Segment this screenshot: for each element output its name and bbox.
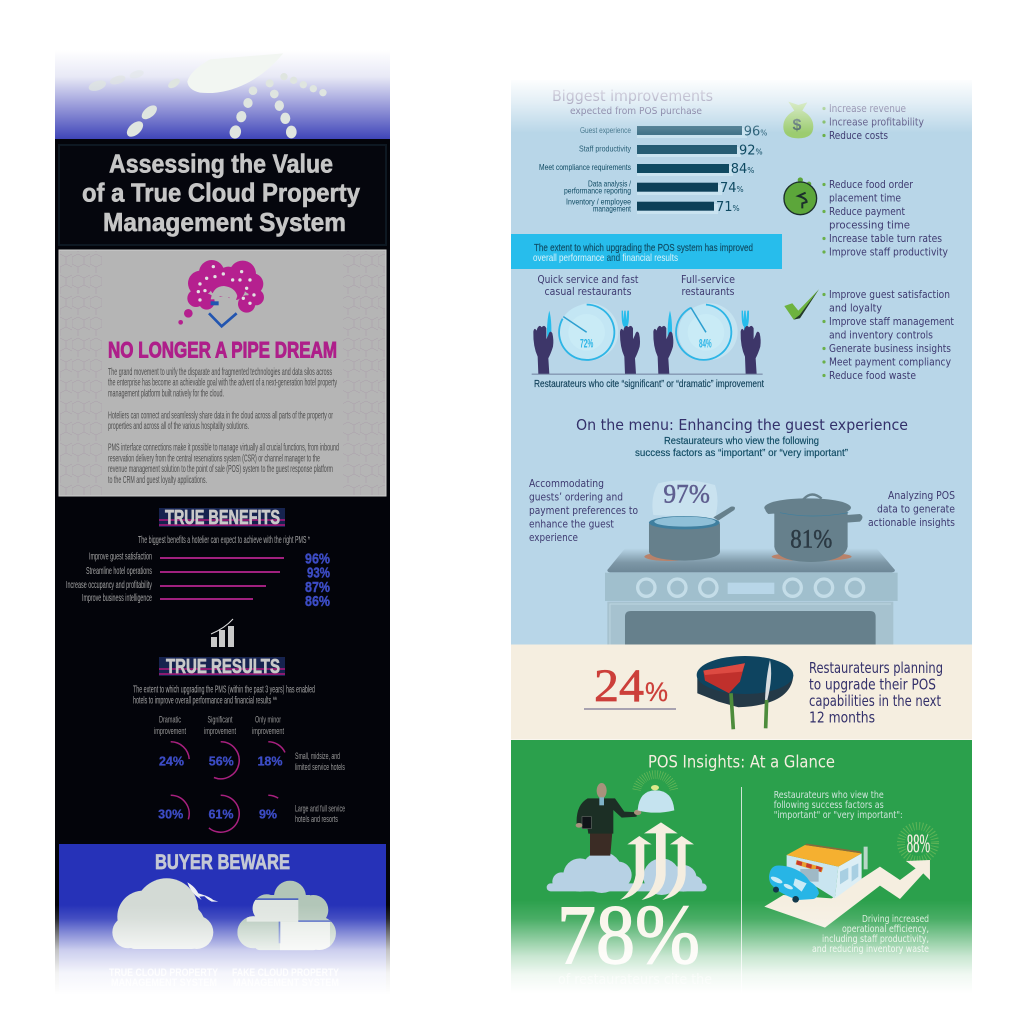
bar chart: true benefits: 96% [305,551,330,567]
panel: POS insights at a glance [511,740,972,1002]
bar chart: biggest improvements [539,124,767,215]
text: success factors intro: Restaurateurs who view the [774,790,884,801]
text block: intro: management platform built natively for the cloud. [108,388,224,400]
text: cloud labels: MANAGEMENT SYSTEM [233,977,339,989]
text: planning to upgrade [809,659,943,726]
stat: 88 percent with sunburst [901,826,935,860]
icon: true cloud with birds [112,878,218,949]
text: planning to upgrade: Restaurateurs planning [809,659,943,677]
text: restaurant categories: casual restaurants [544,286,632,298]
text block: intro: revenue management solution to the point of sale (POS) system to the guest response platform [108,463,333,475]
chart: plates with hands and cutlery: 72% [580,336,594,350]
text: analyzing POS data: Analyzing POS [888,490,955,502]
icon: rising bar chart [211,619,234,647]
text block: intro [108,366,339,486]
bar chart: true benefits: Increase occupancy and profitability [66,580,152,591]
heading: on the menu [576,416,908,459]
bar chart: biggest improvements: 74% [720,181,744,196]
radial charts: true results: 56% [209,754,234,768]
bar chart: true benefits: 86% [305,594,330,610]
radial charts: true results: improvement [204,726,236,737]
radial charts: true results: 24% [159,754,184,768]
list: revenue benefits: Increase revenue [829,103,906,115]
heading: on the menu: success factors as “important” or “very important” [635,447,848,459]
list: speed benefits: processing time [829,220,910,232]
list: operations benefits: Generate business insights [829,343,951,355]
stat: 24 percent [584,660,676,712]
banner: extent of improvement: The extent to which upgrading the POS system has improved [534,242,753,254]
icon: saucepan with steam [649,479,735,561]
radial charts: true results: 61% [208,808,234,822]
radial charts: true results: 9% [259,808,277,822]
text block: intro: properties and across all of the various hospitality solutions. [108,420,249,432]
list: operations benefits: Improve guest satisfaction [829,289,950,301]
list: revenue benefits: Reduce costs [829,130,888,142]
radial charts: true results: Only minor [255,714,281,726]
radial charts: true results: Significant [208,714,233,726]
bar chart: biggest improvements: 96% [744,124,767,140]
list: operations benefits: Improve staff management [829,316,954,328]
icon: stopwatch [784,177,817,215]
bar chart: biggest improvements: 92% [739,144,763,158]
bar chart: biggest improvements: 71% [716,200,740,215]
bar chart: true benefits: Streamline hotel operations [86,566,152,577]
panel: left infographic, hotel PMS [55,50,390,999]
banner: extent of improvement [511,234,782,269]
radial charts: true results [154,714,345,832]
stat: 24 percent: 24 [594,660,644,712]
text: benefits subtitle: The biggest benefits a hotelier can expect to achieve with the right PMS * [138,535,310,546]
text block: intro: reservation delivery from the central reservations system (CSR) or channel manager to the [108,452,320,464]
text: results subtitle: The extent to which upgrading the PMS (within the past 3 years) has enabled [133,684,315,696]
text: analyzing POS data: actionable insights [868,517,955,529]
heading: biggest improvements: expected from POS purchase [570,106,702,117]
icon: fake cloud made of panels [237,878,337,952]
text: planning to upgrade: to upgrade their POS [809,676,936,694]
bar chart: true benefits: 93% [307,566,330,582]
heading: true results: TRUE RESULTS [166,656,280,678]
text block: intro: the enterprise has become an achievable goal with the advent of a next-generation hotel property [108,377,337,389]
panel: planning to upgrade [511,644,972,740]
text: operational efficiency: and reducing inventory waste [812,944,929,955]
heading: on the menu: Restaurateurs who view the following [664,435,819,447]
text: planning to upgrade: capabilities in the next [809,692,941,710]
text block: intro: PMS interface connections make it possible to manage virtually all crucial functions, from inbound [108,442,339,454]
heading: biggest improvements: Biggest improvements [552,87,713,105]
list: revenue benefits: Increase profitability [829,116,924,128]
icon: money bag [783,102,813,138]
illustration: stove with pots [605,479,898,645]
text block: intro: to the CRM and guest loyalty applications. [108,474,207,486]
bar chart: biggest improvements: Staff productivity [579,144,632,154]
text: restaurant categories: restaurants [682,286,734,298]
text: analyzing POS data [868,490,955,529]
text: cloud labels [109,967,340,989]
bar chart: biggest improvements: Data analysis / [588,178,631,188]
bar chart: true benefits: Improve guest satisfaction [89,552,152,562]
title block: Assessing the Value [109,149,333,179]
icon: check mark [784,289,819,320]
heading: no longer a pipe dream: NO LONGER A PIPE DREAM [108,337,337,362]
panel: no longer a pipe dream [59,250,386,496]
bar chart: biggest improvements: Meet compliance requirements [539,162,631,172]
text: ordering preferences: enhance the guest [529,518,614,530]
text: operational efficiency [812,914,929,955]
text block: intro: The grand movement to unify the disparate and fragmented technologies and data silos across [108,366,332,378]
list: operations benefits: and loyalty [829,302,882,314]
text: cloud labels: MANAGEMENT SYSTEM [111,977,217,989]
stat: 24 percent: % [645,677,668,707]
heading: biggest improvements [552,87,713,117]
title block: Management System [103,207,346,237]
chart: plates with hands and cutlery [532,303,763,375]
text: ordering preferences: Accommodating [529,478,604,490]
text: restaurant categories: Full-service [681,274,735,286]
icon: saucepan with steam: 97% [663,479,710,509]
text: cloud labels: FAKE CLOUD PROPERTY [232,967,340,979]
chart: plates with hands and cutlery: 84% [699,336,712,350]
radial charts: true results: Dramatic [159,714,181,726]
text: 78 percent description: of restaurateurs cite the [558,972,712,988]
text: success factors intro [774,790,903,821]
text: restaurant categories [538,274,735,298]
illustration: waiter on cloud with arrows [547,775,707,900]
radial charts: true results: Small, midsize, and [295,751,340,762]
bar chart: true benefits: 87% [305,580,330,596]
stat: 78 percent: 78% [557,888,700,982]
bar chart: biggest improvements: 84% [731,162,754,177]
title block: of a True Cloud Property [82,178,360,208]
icon: sun rays and cloud at the top [87,53,327,140]
icon: stockpot with lid [764,494,862,562]
list: operations benefits: Reduce food waste [829,370,916,382]
bar chart: true benefits: Improve business intelligence [82,593,152,604]
icon: money bag: $ [793,117,802,134]
list: speed benefits: Reduce food order [829,179,914,191]
list: operations benefits [822,289,954,382]
banner: extent of improvement: overall performance and financial results [533,252,678,264]
text: plates caption: Restaurateurs who cite “significant” or “dramatic” improvement [534,378,764,390]
text: operational efficiency: operational efficiency, [842,924,929,935]
text: ordering preferences: payment preferences to [529,505,638,517]
text: restaurant categories: Quick service and fast [538,274,638,286]
heading: buyer beware: BUYER BEWARE [155,851,290,874]
text: operational efficiency: including staff productivity, [822,934,929,945]
text: results subtitle [133,684,315,706]
panel: right infographic, restaurant POS [511,80,972,645]
text: ordering preferences: guests’ ordering and [529,492,623,504]
radial charts: true results: improvement [154,726,186,737]
list: operations benefits: and inventory controls [829,330,933,342]
text: operational efficiency: Driving increased [862,914,929,925]
list: revenue benefits [822,103,924,142]
list: speed benefits [822,179,948,258]
text: ordering preferences [529,478,638,544]
list: speed benefits: Reduce payment [829,206,905,218]
bar chart: biggest improvements: performance reporting [564,186,631,196]
radial charts: true results: Large and full service [295,804,345,814]
text: cloud labels: TRUE CLOUD PROPERTY [109,967,219,979]
radial charts: true results: improvement [252,726,284,737]
text: success factors intro: following success factors as [774,800,884,811]
illustration: restaurant, car and rising arrow [764,844,930,928]
radial charts: true results: limited service hotels [295,762,345,773]
icon: stockpot with lid: 81% [790,523,832,553]
list: operations benefits: Meet payment compliancy [829,356,951,368]
text: analyzing POS data: data to generate [877,504,955,516]
panel: buyer beware [59,844,386,980]
heading: POS insights: POS Insights: At a Glance [648,752,835,772]
list: speed benefits: placement time [829,192,901,204]
text: success factors intro: "important" or "very important": [774,810,903,821]
list: speed benefits: Improve staff productivity [829,246,948,258]
bar chart: true benefits [66,551,330,610]
heading: true benefits: TRUE BENEFITS [165,507,280,529]
bar chart: biggest improvements: Guest experience [580,125,631,135]
icon: thought cloud [178,260,264,326]
radial charts: true results: 30% [158,808,183,822]
text: results subtitle: hotels to improve overall performance and financial results ** [133,696,277,706]
text: ordering preferences: experience [529,532,578,544]
radial charts: true results: hotels and resorts [295,814,338,825]
heading: on the menu: On the menu: Enhancing the guest experience [576,416,908,434]
stat: 88 percent with sunburst: 88% [907,829,930,858]
text block: intro: Hoteliers can connect and seamlessly share data in the cloud across all parts of the property or [108,409,333,421]
text: planning to upgrade: 12 months [809,708,875,726]
illustration: plate with steak and cutlery [697,656,793,729]
radial charts: true results: 18% [257,754,283,768]
list: speed benefits: Increase table turn rates [829,233,942,245]
title block [59,145,386,245]
bar chart: biggest improvements: management [593,204,631,214]
bar chart: biggest improvements: Inventory / employee [566,196,631,206]
